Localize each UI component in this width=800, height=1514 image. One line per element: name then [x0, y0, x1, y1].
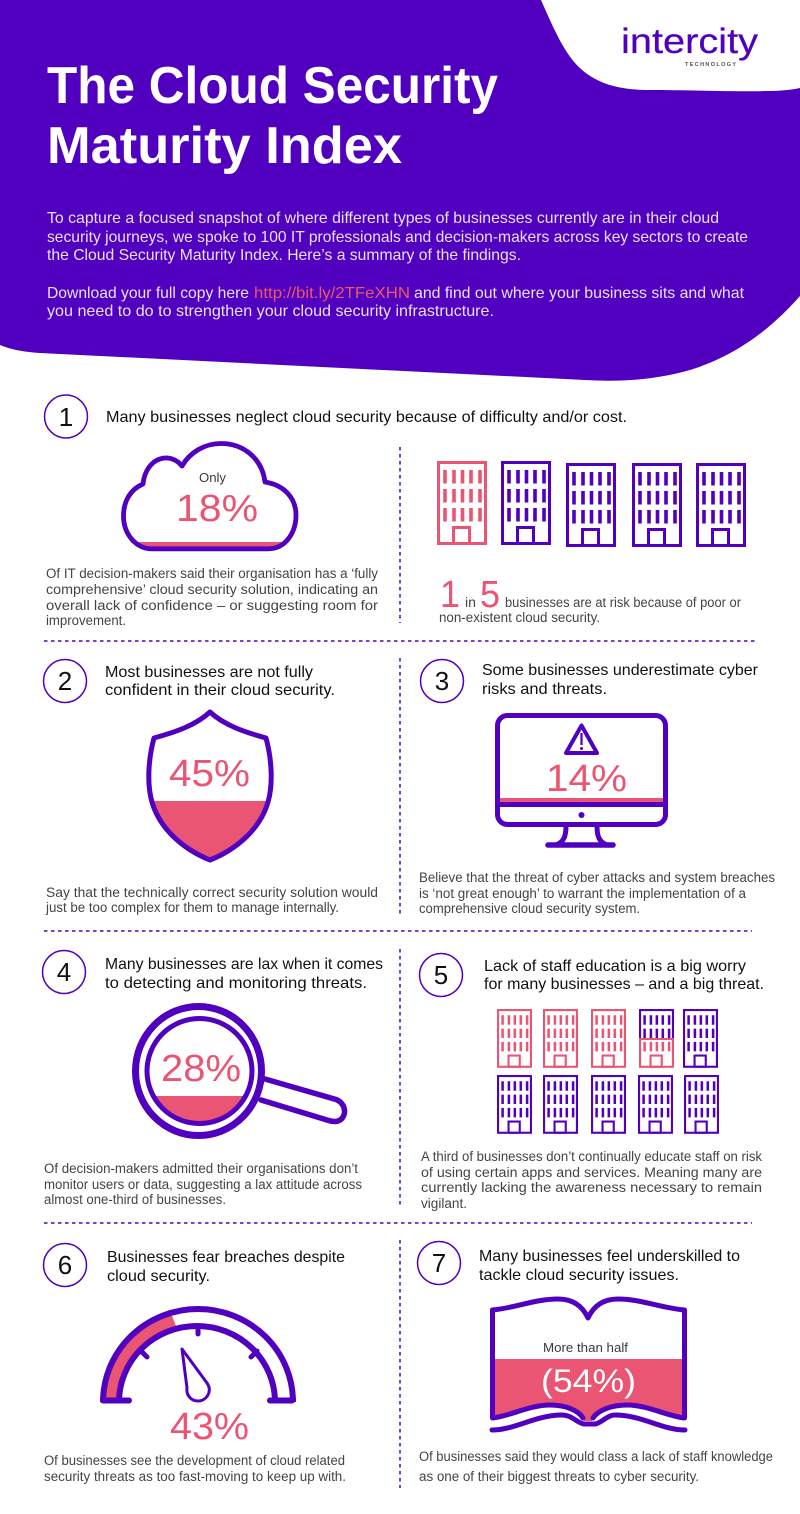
cloud icon: 18% — [176, 488, 258, 530]
number badge 3 — [420, 660, 464, 702]
text: 18% description: improvement. — [46, 613, 126, 628]
heading 4 — [105, 956, 383, 992]
intro text: and find out where your business sits and what — [414, 285, 745, 302]
text: 45% description — [45, 885, 378, 915]
book icon: More than half — [543, 1340, 628, 1355]
text: 18% description: Of IT decision-makers said their organisation has a ‘fully — [46, 566, 378, 581]
section 2 — [44, 660, 378, 915]
section 4 — [42, 950, 383, 1207]
heading 5: for many businesses – and a big threat. — [484, 976, 764, 993]
title: Maturity Index — [47, 117, 402, 175]
heading 6: Businesses fear breaches despite — [107, 1249, 345, 1266]
number badge 5 — [420, 954, 462, 996]
number badge 7 — [418, 1242, 460, 1284]
number badge 4: 4 — [57, 957, 71, 987]
logo: intercity — [621, 22, 759, 61]
cloud icon: Only — [199, 470, 227, 485]
intro text — [47, 210, 748, 320]
intro text: security journeys, we spoke to 100 IT professionals and decision-makers across key sectors to create — [47, 229, 748, 246]
magnifier icon: 28% — [161, 1048, 241, 1090]
heading 4: to detecting and monitoring threats. — [105, 975, 367, 992]
text: 14% description: Believe that the threat of cyber attacks and system breaches — [419, 870, 775, 885]
header panel — [0, 0, 800, 381]
buildings grid: a third highlighted — [498, 1010, 718, 1133]
header background shape — [0, 0, 800, 381]
text: 54% description: as one of their biggest threats to cyber security. — [419, 1469, 699, 1484]
text: 18% description: comprehensive’ cloud security solution, indicating an — [46, 582, 378, 597]
number badge 6 — [44, 1244, 86, 1286]
text: 1 in 5: 5 — [480, 574, 500, 616]
text: 45% description: just be too complex for them to manage internally. — [45, 900, 339, 915]
number badge 5: 5 — [434, 960, 448, 990]
section 3 — [419, 660, 775, 916]
intro text: http://bit.ly/2TFeXHN — [254, 285, 410, 302]
heading 3: risks and threats. — [482, 681, 607, 698]
text: 1 in 5 — [439, 574, 741, 625]
text: 1 in 5: businesses are at risk because of poor or — [505, 595, 741, 610]
text: 45% description: Say that the technically correct security solution would — [46, 885, 378, 900]
shield icon — [149, 712, 271, 860]
gauge icon: 43% — [170, 1406, 249, 1448]
section 5 — [420, 954, 764, 1211]
heading 5 — [484, 958, 764, 993]
text: 54% description: Of businesses said they would class a lack of staff knowledge — [419, 1449, 773, 1464]
number badge 7: 7 — [432, 1248, 446, 1278]
gauge icon — [103, 1309, 293, 1448]
text: staff education description — [421, 1149, 762, 1211]
text: 14% description: comprehensive cloud security system. — [419, 901, 640, 916]
text: 43% description — [44, 1453, 346, 1484]
text: 43% description: Of businesses see the development of cloud related — [44, 1453, 345, 1468]
magnifier icon — [136, 1006, 345, 1136]
intro text: you need to do to strengthen your cloud security infrastructure. — [47, 303, 494, 320]
heading 7: tackle cloud security issues. — [479, 1267, 679, 1284]
heading 1: Many businesses neglect cloud security because of difficulty and/or cost. — [106, 409, 627, 426]
buildings row: 1 in 5 — [438, 462, 744, 546]
heading 6 — [107, 1249, 345, 1285]
shield icon: 45% — [169, 753, 250, 795]
text: 28% description: almost one-third of businesses. — [44, 1192, 226, 1207]
heading 3: Some businesses underestimate cyber — [482, 662, 759, 679]
number badge 1 — [44, 395, 88, 438]
monitor icon — [497, 716, 666, 845]
heading 2: Most businesses are not fully — [105, 664, 313, 681]
heading 6: cloud security. — [107, 1268, 210, 1285]
text: 28% description: monitor users or data, suggesting a lax attitude across — [44, 1177, 362, 1192]
text: 18% description: overall lack of confidence – or suggesting room for — [46, 598, 379, 613]
title — [47, 57, 498, 175]
section 1 — [44, 395, 744, 628]
divider vertical — [399, 447, 401, 623]
text: 1 in 5: in — [465, 595, 476, 610]
heading 5: Lack of staff education is a big worry — [484, 958, 746, 975]
book icon: (54%) — [541, 1363, 636, 1399]
heading 3 — [482, 662, 759, 698]
text: staff education description: A third of businesses don’t continually educate staff on risk — [421, 1149, 762, 1164]
intro text: To capture a focused snapshot of where different types of businesses currently are in their cloud — [47, 210, 719, 227]
section 6 — [44, 1244, 346, 1484]
heading 7 — [479, 1248, 740, 1284]
intro text: the Cloud Security Maturity Index. Here’s a summary of the findings. — [47, 247, 521, 264]
logo: TECHNOLOGY — [685, 62, 736, 68]
number badge 1: 1 — [59, 402, 73, 432]
book icon — [492, 1299, 685, 1430]
text: 14% description — [419, 870, 775, 916]
number badge 2 — [44, 660, 86, 702]
section 7 — [418, 1242, 773, 1484]
number badge 3: 3 — [435, 666, 449, 696]
text: 28% description: Of decision-makers admitted their organisations don’t — [44, 1161, 358, 1176]
text: 28% description — [44, 1161, 362, 1207]
number badge 2: 2 — [58, 666, 72, 696]
number badge 6: 6 — [58, 1250, 72, 1280]
text: 54% description — [419, 1449, 773, 1484]
heading 2: confident in their cloud security. — [105, 682, 335, 699]
monitor icon: 14% — [546, 758, 627, 800]
number badge 4 — [42, 950, 86, 994]
text: staff education description: of using certain apps and services. Meaning many are — [421, 1165, 762, 1180]
heading 4: Many businesses are lax when it comes — [105, 956, 383, 973]
text: 18% description — [46, 566, 379, 628]
cloud icon — [124, 444, 296, 549]
text: 1 in 5: non-existent cloud security. — [439, 610, 600, 625]
intro text: Download your full copy here — [47, 285, 249, 302]
text: 1 in 5: 1 — [440, 574, 460, 616]
title: The Cloud Security — [47, 57, 498, 115]
heading 2 — [105, 664, 335, 699]
text: 14% description: is ‘not great enough’ to warrant the implementation of a — [419, 886, 746, 901]
heading 7: Many businesses feel underskilled to — [479, 1248, 740, 1265]
text: staff education description: vigilant. — [421, 1196, 467, 1211]
text: staff education description: currently lacking the awareness necessary to remain — [421, 1180, 762, 1195]
text: 43% description: security threats as too fast-moving to keep up with. — [44, 1469, 346, 1484]
